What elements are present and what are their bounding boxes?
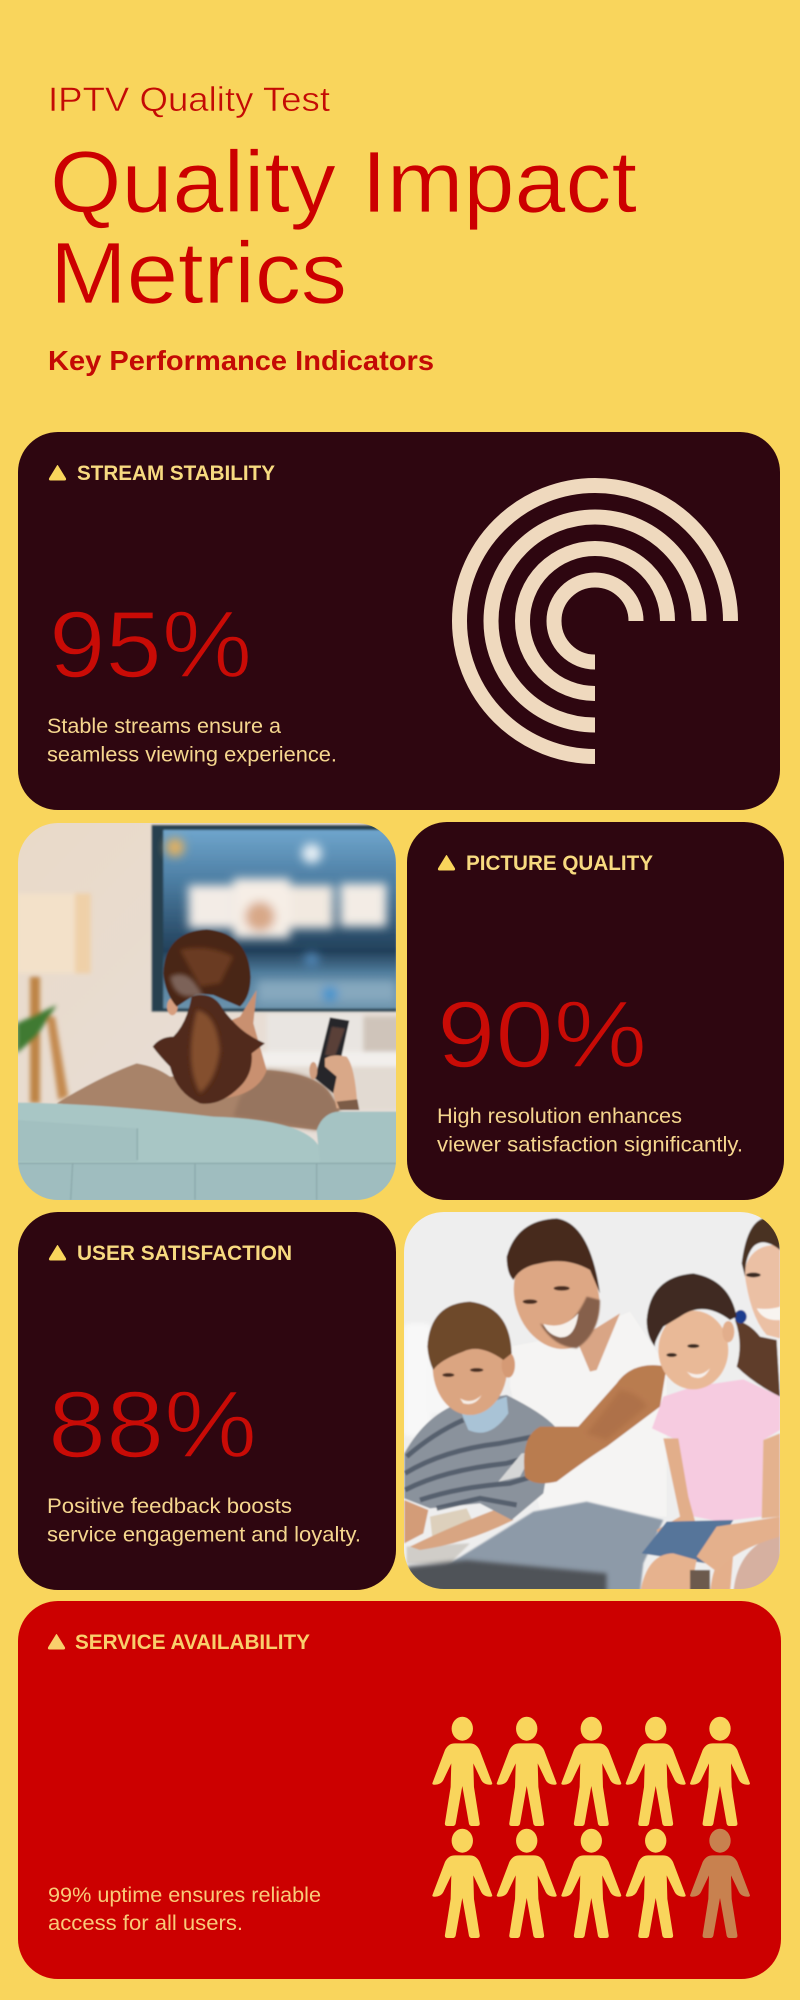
description: High resolution enhances xyxy=(437,1105,682,1128)
girl shirt xyxy=(652,1379,780,1522)
stat: 88%: 88% xyxy=(48,1372,257,1478)
pictogram: people 99% xyxy=(432,1717,750,1938)
icon: triangle xyxy=(49,1246,66,1260)
neck xyxy=(226,990,267,1098)
description: viewer satisfaction significantly. xyxy=(437,1134,743,1156)
icon: triangle xyxy=(49,466,66,480)
description: access for all users. xyxy=(48,1912,243,1935)
description xyxy=(48,1884,321,1935)
panel: service availability xyxy=(18,1601,781,1979)
sofa xyxy=(17,1103,321,1163)
eyebrow heading: IPTV Quality Test xyxy=(48,81,331,119)
mother smile xyxy=(757,1307,780,1320)
man eyes xyxy=(523,1286,570,1304)
boy eyes xyxy=(442,1368,483,1377)
lamp xyxy=(17,893,91,1103)
stat: 90%: 90% xyxy=(437,982,647,1088)
photo: woman watching tv xyxy=(17,820,400,1203)
mother face xyxy=(744,1245,780,1338)
panel: stream stability xyxy=(18,432,780,810)
jeans xyxy=(450,1500,664,1589)
description xyxy=(47,715,337,766)
mother hair xyxy=(742,1218,780,1277)
description: Positive feedback boosts xyxy=(47,1495,292,1518)
girl head xyxy=(658,1311,728,1389)
girl ponytail xyxy=(735,1320,780,1397)
label: user satisfaction: USER SATISFACTION xyxy=(77,1242,292,1265)
label: picture quality: PICTURE QUALITY xyxy=(466,852,653,875)
description: service engagement and loyalty. xyxy=(47,1524,361,1546)
boy head xyxy=(432,1348,508,1416)
tv xyxy=(152,825,397,1012)
remote xyxy=(315,1017,349,1093)
boy sweater xyxy=(404,1395,555,1520)
description: seamless viewing experience. xyxy=(47,744,337,766)
man head xyxy=(513,1260,600,1350)
main title xyxy=(50,134,637,322)
description: 99% uptime ensures reliable xyxy=(48,1884,321,1907)
man arm xyxy=(524,1365,667,1483)
label: stream stability: STREAM STABILITY xyxy=(77,462,275,485)
hand xyxy=(325,1055,357,1108)
woman shirt xyxy=(57,1063,340,1130)
boy collar xyxy=(462,1397,508,1433)
stat: 95%: 95% xyxy=(49,592,252,698)
panel: picture quality xyxy=(407,822,784,1200)
label: service availability: SERVICE AVAILABILITY xyxy=(75,1631,310,1654)
chart: concentric arcs xyxy=(460,486,730,756)
description: Stable streams ensure a xyxy=(47,715,281,738)
tv stand xyxy=(262,1014,396,1067)
boy arms xyxy=(404,1500,428,1543)
panel: user satisfaction xyxy=(18,1212,396,1590)
main title: Quality Impact xyxy=(50,134,637,231)
tv screen content xyxy=(166,838,397,1003)
girl arms and legs xyxy=(656,1438,696,1533)
description xyxy=(47,1495,361,1546)
ear xyxy=(167,998,178,1015)
icon: triangle xyxy=(48,1634,65,1649)
hair xyxy=(163,929,251,1007)
man shirt xyxy=(510,1312,667,1517)
remote xyxy=(498,1452,526,1482)
description xyxy=(437,1105,743,1156)
man neck xyxy=(577,1313,620,1372)
photo: family on sofa xyxy=(400,1210,800,1593)
subtitle: Key Performance Indicators xyxy=(48,345,434,376)
mother eye xyxy=(746,1273,761,1277)
girl eyes xyxy=(666,1344,699,1357)
scrunchie xyxy=(735,1310,747,1323)
main title: Metrics xyxy=(50,225,347,322)
icon: triangle xyxy=(438,856,455,870)
